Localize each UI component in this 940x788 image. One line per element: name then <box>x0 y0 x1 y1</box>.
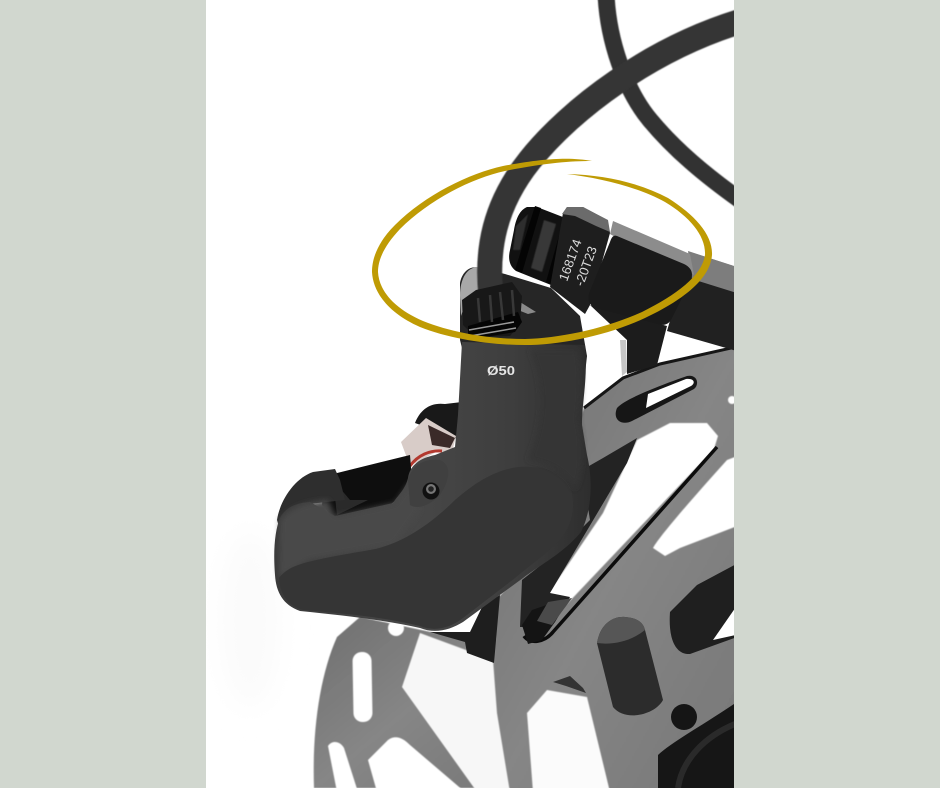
plate window <box>520 303 536 314</box>
front hose <box>490 20 745 296</box>
disc cut-outs <box>328 396 740 788</box>
rear hose loop <box>606 0 740 200</box>
brake caliper photo illustration <box>206 0 734 788</box>
disc mounting post <box>597 617 663 715</box>
right side panel <box>734 0 940 788</box>
brake disc: main section <box>495 346 740 788</box>
light strip on leg <box>620 340 627 376</box>
left side panel <box>0 0 206 788</box>
screw <box>422 482 440 500</box>
hub highlight <box>678 722 740 788</box>
disc top slot <box>616 376 697 423</box>
brake disc: lower-left section <box>314 617 520 788</box>
hub <box>658 704 734 788</box>
small bolt <box>671 704 697 730</box>
right disc opening <box>670 565 734 654</box>
size marking: Ø50 <box>487 364 515 378</box>
caliper front arm top <box>277 469 343 524</box>
yellow hand-drawn highlight circle <box>372 159 712 345</box>
caliper body <box>274 342 591 631</box>
interior highlight <box>336 492 368 515</box>
lower caliper block <box>430 595 500 663</box>
caliper body lower panel <box>279 468 518 629</box>
adapter arm <box>667 256 734 350</box>
hose fitting <box>509 206 562 285</box>
caliper front arm interior <box>322 455 412 520</box>
soft background shading <box>220 530 480 760</box>
banjo arm top highlight <box>562 207 610 232</box>
hose nut <box>462 282 522 340</box>
caliper top plate <box>460 267 587 368</box>
caliper body upper shading <box>275 484 406 574</box>
rear caliper piston top <box>415 402 459 438</box>
photo contents <box>274 0 734 788</box>
lower disc shadow pocket <box>553 676 586 693</box>
caliper neck right shading <box>528 350 582 490</box>
translucent seal <box>401 418 456 466</box>
adapter arm top edge <box>688 251 734 292</box>
white photo background <box>206 0 734 788</box>
banjo arm <box>550 207 610 314</box>
part number: 168174 <box>556 237 585 283</box>
part number second line: -20T23 <box>572 244 600 288</box>
screw boss <box>408 460 448 507</box>
adapter leg <box>590 305 667 374</box>
disc dark top edge <box>584 346 740 408</box>
caliper mount bracket <box>520 438 637 627</box>
plate light edge <box>460 268 478 316</box>
head block <box>588 236 692 325</box>
black disc slot <box>522 447 717 644</box>
head block edge <box>610 221 694 275</box>
